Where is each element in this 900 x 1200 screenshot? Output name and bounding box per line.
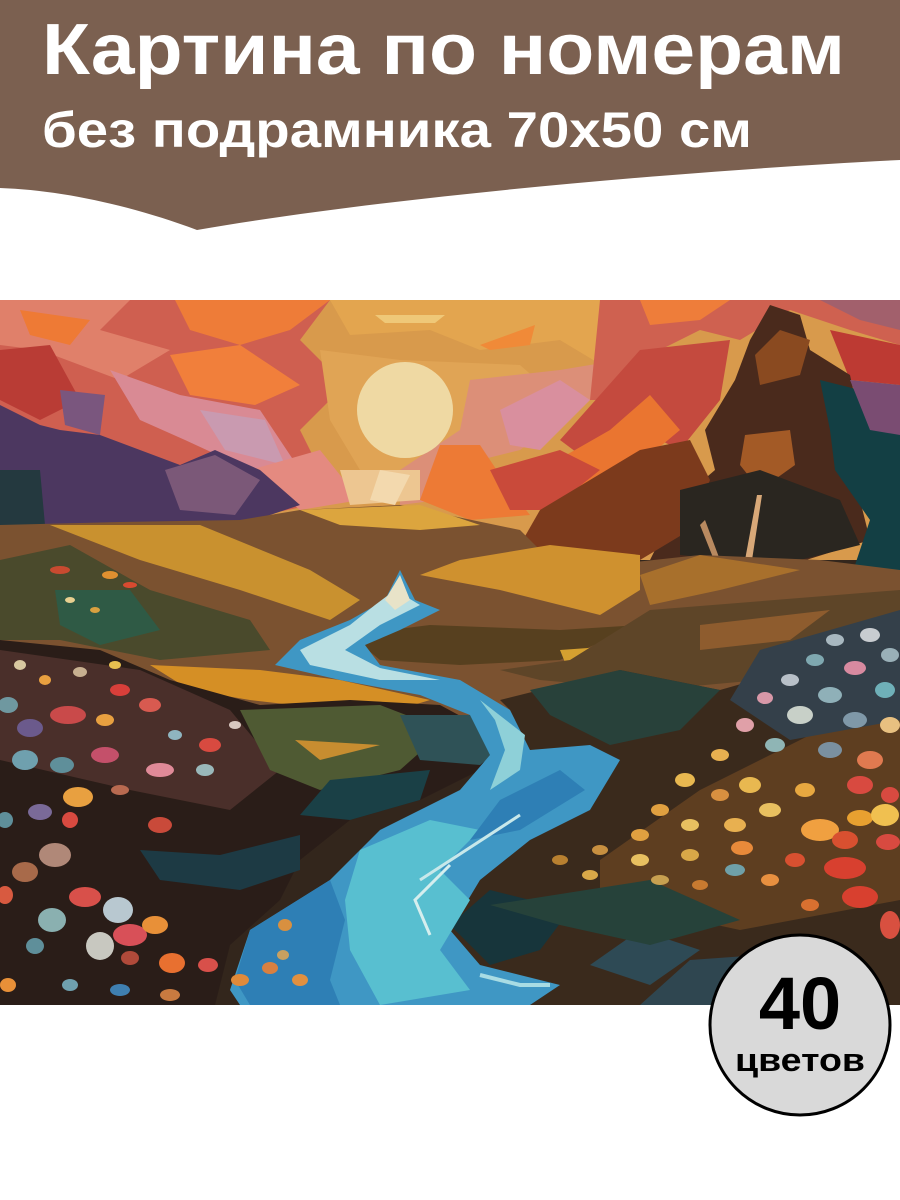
painting: right bank <box>450 610 900 1005</box>
badge: 40 colours: цветов <box>735 1042 865 1078</box>
header banner <box>0 0 900 230</box>
painting: base <box>0 300 900 1005</box>
painting: tree and dark forest <box>520 305 900 580</box>
painting: flowers right <box>552 628 900 939</box>
painting: left flower field <box>0 640 505 1005</box>
badge: 40 colours: 40 <box>759 962 841 1045</box>
panel: painting <box>0 300 900 1005</box>
title: Картина по номерам <box>42 10 845 90</box>
badge: 40 colours <box>710 935 890 1115</box>
painting: golden meadow <box>0 505 900 720</box>
painting: flowers left <box>0 566 308 1001</box>
painting: purple hills <box>0 405 300 530</box>
painting: river <box>230 570 620 1005</box>
subtitle: без подрамника 70х50 см <box>42 102 752 158</box>
painting: sky <box>0 300 900 560</box>
icon: sun <box>357 362 453 458</box>
